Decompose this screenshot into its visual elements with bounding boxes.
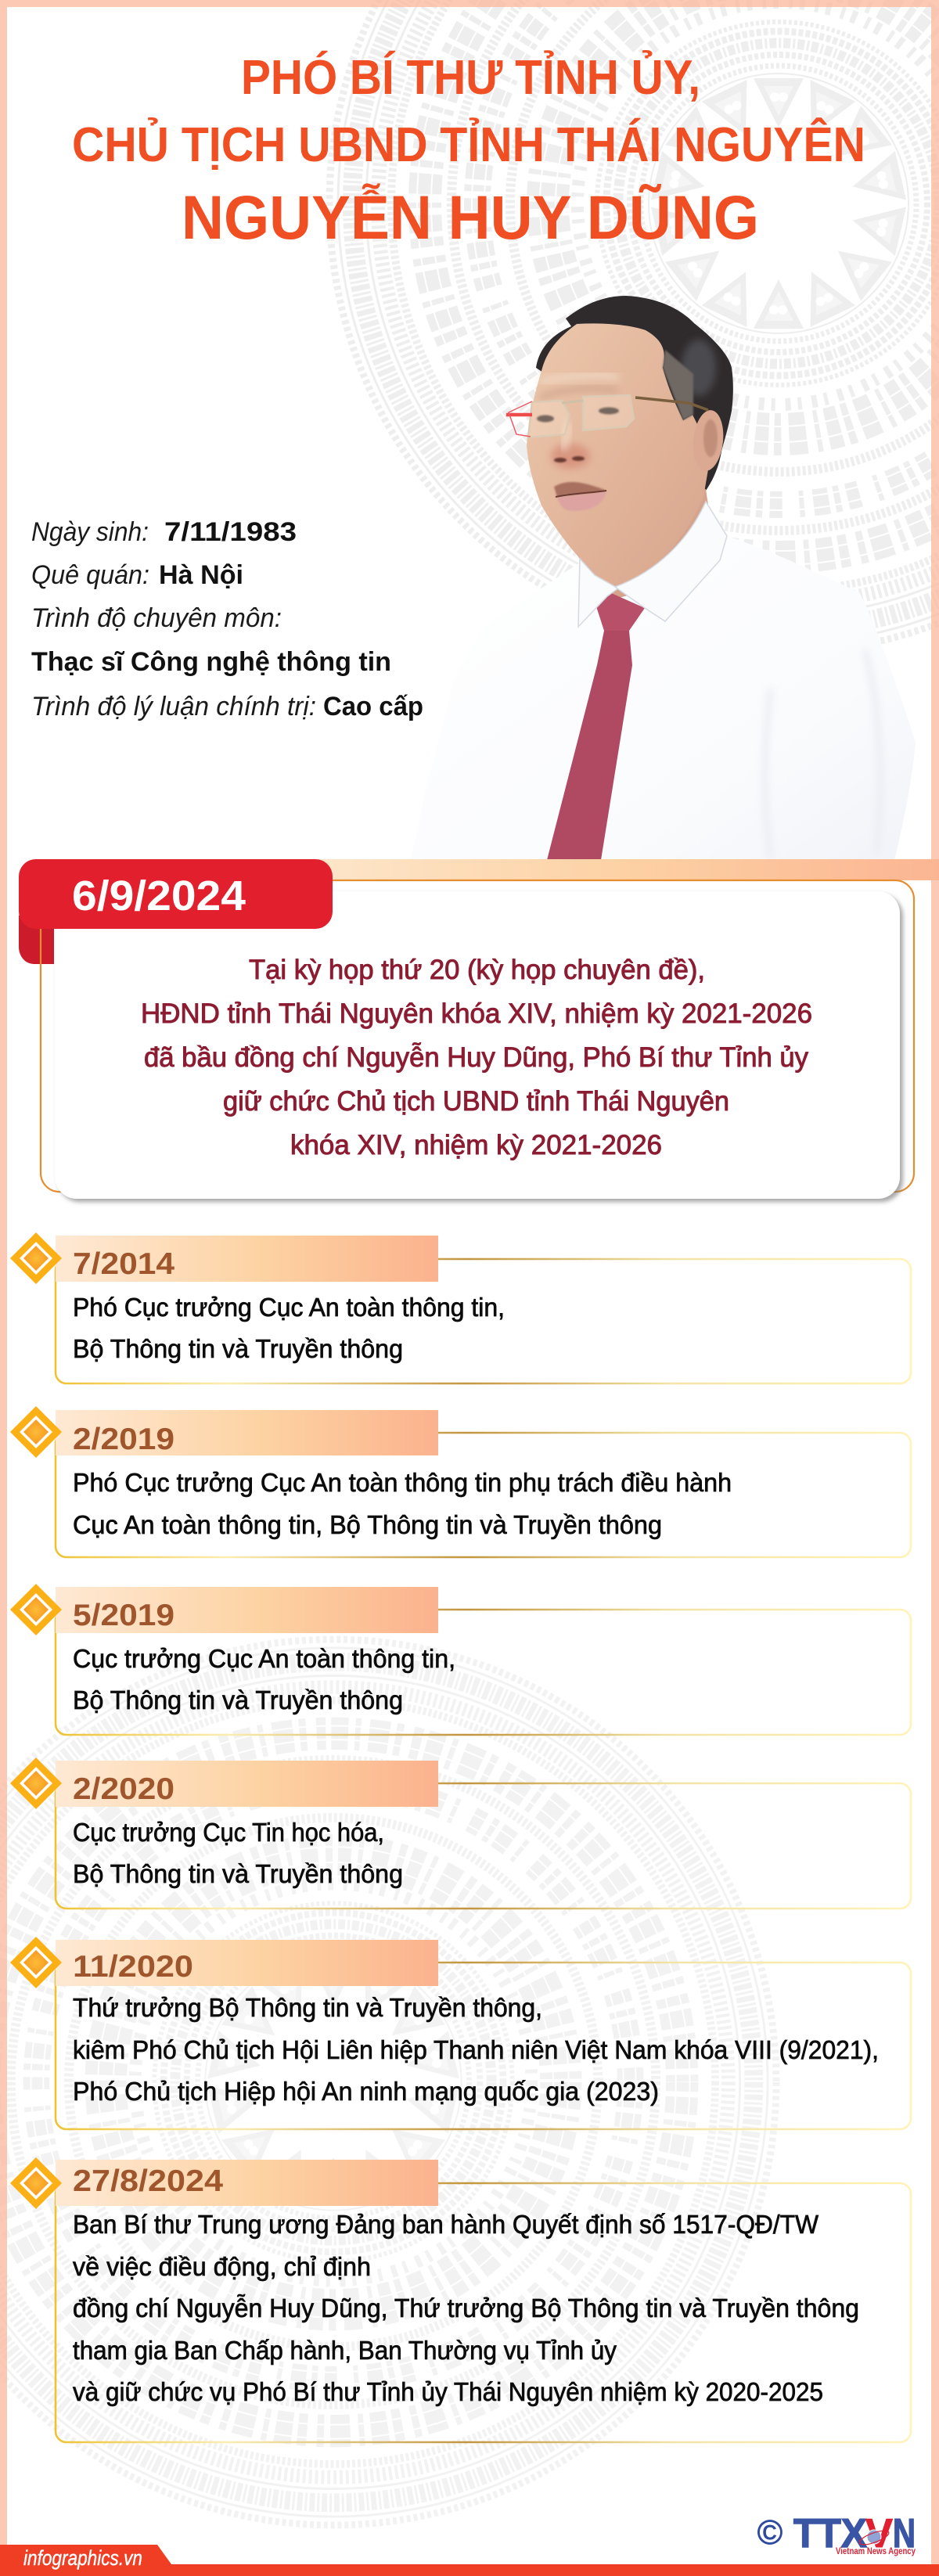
timeline item: 27/8/2024: và giữ chức vụ Phó Bí thư Tỉnh ủy Thái Nguyên nhiệm kỳ 2020-2025 [73,2377,823,2406]
footer bar with infographics.vn [0,2545,939,2576]
event description: giữ chức Chủ tịch UBND tỉnh Thái Nguyên [223,1086,729,1117]
timeline item: 5/2019: Bộ Thông tin và Truyền thông [73,1686,403,1714]
timeline item: 2/2020: 2/2020 [73,1772,174,1806]
event description: khóa XIV, nhiệm kỳ 2021-2026 [290,1130,662,1160]
timeline item: 27/8/2024 [10,2157,911,2442]
shirt [411,502,916,860]
logo: TTXVN: TTX [793,2511,867,2556]
timeline item: 27/8/2024: Ban Bí thư Trung ương Đảng ban hành Quyết định số 1517-QĐ/TW [73,2210,819,2239]
timeline item: 27/8/2024: về việc điều động, chỉ định [73,2252,371,2281]
timeline item: 2/2019: Phó Cục trưởng Cục An toàn thông tin phụ trách điều hành [73,1468,732,1497]
timeline item: 11/2020: Phó Chủ tịch Hiệp hội An ninh mạng quốc gia (2023) [73,2077,659,2106]
event description [141,955,812,1160]
event description: Tại kỳ họp thứ 20 (kỳ họp chuyên đề), [249,955,705,985]
facial features [537,376,619,511]
portrait photo [411,296,916,860]
personal info block: Ngày sinh: [31,517,149,547]
title [72,51,865,252]
personal info block: Quê quán: [31,560,149,590]
timeline item: 11/2020 [10,1937,911,2129]
timeline item: 5/2019: 5/2019 [73,1599,174,1632]
timeline item: 7/2014: 7/2014 [73,1247,174,1281]
hair highlight [682,340,716,396]
timeline item: 5/2019: Cục trưởng Cục An toàn thông tin, [73,1644,455,1673]
timeline item: 2/2020: Bộ Thông tin và Truyền thông [73,1859,403,1888]
timeline item: 7/2014: Phó Cục trưởng Cục An toàn thông tin, [73,1293,505,1322]
glasses [506,395,708,437]
timeline item: 2/2019: 2/2019 [73,1423,174,1456]
timeline item: 5/2019 [10,1584,911,1735]
orange outline [41,880,914,1192]
header gradient band [313,859,939,880]
logo: TTXVN: Vietnam News Agency [836,2547,916,2556]
personal info block: Trình độ chuyên môn: [31,603,282,633]
background: upper bronze drum [329,0,939,653]
tie [547,592,645,860]
neck [571,489,708,599]
timeline item: 7/2014 [10,1232,911,1383]
title: PHÓ BÍ THƯ TỈNH ỦY, [241,51,700,105]
event description: đã bầu đồng chí Nguyễn Huy Dũng, Phó Bí thư Tỉnh ủy [144,1042,808,1073]
personal info block: Thạc sĩ Công nghệ thông tin [31,647,391,677]
personal info block [31,517,423,721]
timeline item: 7/2014: Bộ Thông tin và Truyền thông [73,1334,403,1363]
logo: TTXVN: V [865,2511,893,2556]
hair [536,296,733,491]
timeline item: 11/2020: kiêm Phó Chủ tịch Hội Liên hiệp Thanh niên Việt Nam khóa VIII (9/2021), [73,2035,879,2064]
date tab: 6/9/2024 [72,872,246,919]
title: CHỦ TỊCH UBND TỈNH THÁI NGUYÊN [72,118,865,172]
timeline item: 27/8/2024: đồng chí Nguyễn Huy Dũng, Thứ trưởng Bộ Thông tin và Truyền thông [73,2294,859,2322]
logo: TTXVN: © [757,2513,782,2552]
personal info block: Cao cấp [323,692,423,721]
personal info block: Trình độ lý luận chính trị: [31,692,316,721]
tab fold [19,916,54,964]
white content card [55,891,900,1199]
personal info block: 7/11/1983 [164,517,297,547]
panel: 6/9/2024 event [19,859,939,1199]
ear [690,408,726,473]
background: lower bronze drum [0,1639,776,2525]
timeline item: 27/8/2024: tham gia Ban Chấp hành, Ban Thường vụ Tỉnh ủy [73,2336,617,2365]
collar [578,502,727,627]
shirt folds [765,649,880,860]
personal info block: Hà Nội [159,560,243,590]
timeline item: 2/2020: Cục trưởng Cục Tin học hóa, [73,1818,384,1847]
date tab [19,859,333,929]
sideburn [663,350,693,420]
timeline item: 2/2020 [10,1758,911,1909]
event description: HĐND tỉnh Thái Nguyên khóa XIV, nhiệm kỳ 2021-2026 [141,998,812,1029]
timeline item: 27/8/2024: 27/8/2024 [73,2164,223,2198]
face [527,323,708,588]
logo: TTXVN: N [893,2511,916,2556]
timeline item: 2/2019: Cục An toàn thông tin, Bộ Thông tin và Truyền thông [73,1510,662,1539]
timeline item: 11/2020: 11/2020 [73,1950,193,1984]
timeline item: 2/2019 [10,1406,911,1557]
logo: TTXVN [757,2511,916,2556]
timeline item: 11/2020: Thứ trưởng Bộ Thông tin và Truyền thông, [73,1993,542,2022]
footer bar with infographics.vn: infographics.vn [23,2546,142,2570]
title: NGUYỄN HUY DŨNG [182,182,759,252]
